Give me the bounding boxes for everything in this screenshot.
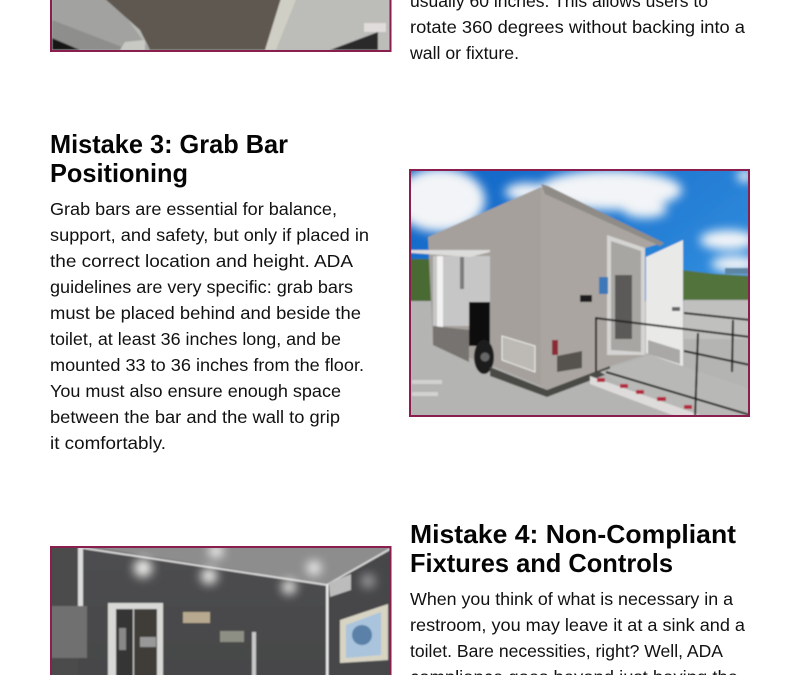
text: grab bar paragraph (50, 199, 369, 453)
text: end of previous paragraph: wall or fixture. (409, 43, 519, 63)
heading: Mistake 3 (50, 129, 288, 188)
text: end of previous paragraph: rotate 360 degrees without backing into a (410, 17, 745, 37)
text: fixtures paragraph (410, 589, 745, 675)
text: grab bar paragraph: mounted 33 to 36 inches from the floor. (50, 355, 364, 375)
heading: Mistake 3: Mistake 3: Grab Bar (50, 129, 288, 159)
text: grab bar paragraph: support, and safety, but only if placed in (50, 225, 369, 245)
text: fixtures paragraph: toilet. Bare necessities, right? Well, ADA (410, 641, 723, 661)
text: end of previous paragraph (409, 0, 745, 63)
text: fixtures paragraph: restroom, you may leave it at a sink and a (410, 615, 745, 635)
heading: Mistake 4 (410, 519, 736, 578)
text: grab bar paragraph: the correct location and height. ADA (50, 251, 353, 271)
heading: Mistake 4: Mistake 4: Non-Compliant (410, 519, 736, 549)
heading: Mistake 3: Positioning (50, 158, 188, 188)
text: grab bar paragraph: guidelines are very specific: grab bars (50, 277, 353, 297)
text: fixtures paragraph: When you think of what is necessary in a (410, 589, 733, 609)
text: grab bar paragraph: between the bar and the wall to grip (50, 407, 340, 427)
heading: Mistake 4: Fixtures and Controls (410, 548, 673, 578)
text: grab bar paragraph: must be placed behind and beside the (50, 303, 361, 323)
text: grab bar paragraph: it comfortably. (50, 433, 166, 453)
text: grab bar paragraph: Grab bars are essential for balance, (50, 199, 337, 219)
text: grab bar paragraph: toilet, at least 36 inches long, and be (50, 329, 341, 349)
photo: restroom trailer interior (45, 540, 395, 675)
photo: ADA restroom trailer exterior (395, 165, 759, 421)
text: grab bar paragraph: You must also ensure enough space (50, 381, 341, 401)
photo: trailer floor detail (50, 0, 392, 52)
